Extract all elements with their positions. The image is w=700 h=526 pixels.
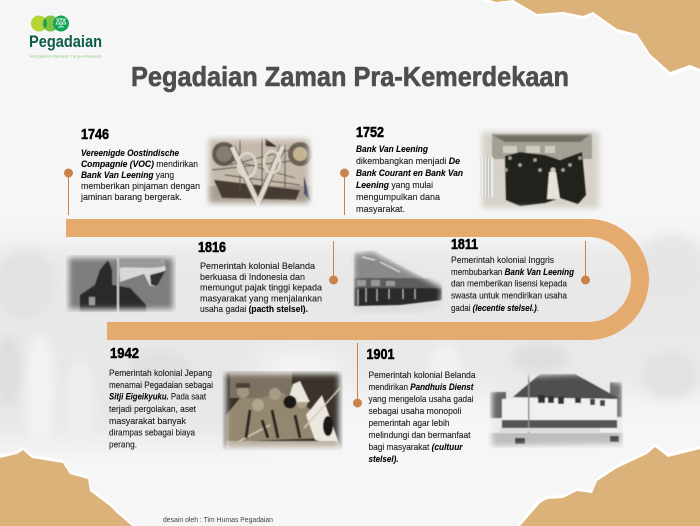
title: Pegadaian Zaman Pra-Kemerdekaan <box>131 61 569 92</box>
photo: colonial pawn office building <box>488 372 623 448</box>
photo: Japanese soldiers with flags <box>222 371 343 450</box>
text block: 1901: mendirikan Pandhuis Dienst <box>368 382 474 392</box>
text block: 1752 <box>356 125 463 214</box>
text block: 1942 <box>109 346 213 450</box>
text block: 1746 <box>80 127 200 202</box>
text block: 1746: memberikan pinjaman dengan <box>81 181 200 191</box>
text block: 1942: terjadi pergolakan, aset <box>109 404 196 414</box>
text block: 1901: stelsel). <box>368 454 398 464</box>
text block: 1746: jaminan barang bergerak. <box>80 192 182 202</box>
text block: 1942: dirampas sebagai biaya <box>109 428 195 438</box>
logo: Pegadaian: Mengatasi Masalah Tanpa Masalah <box>30 54 102 58</box>
text block: 1901 <box>366 347 476 464</box>
text block: 1752: Bank Van Leening <box>356 144 428 154</box>
text block: 1942: Sitji Eigeikyuku. Pada saat <box>109 392 206 402</box>
text block: 1811: membubarkan Bank Van Leening <box>451 267 574 277</box>
photo: flag above a building <box>66 255 176 312</box>
text block: 1942: perang. <box>109 440 137 450</box>
text block: 1816: usaha gadai (pacth stelsel). <box>200 304 308 314</box>
photo: pawn house with crowd <box>350 250 444 314</box>
text block: 1746: Vereenigde Oostindische <box>81 148 179 158</box>
torn paper corner: top right <box>482 0 700 76</box>
text block: 1752: dikembangkan menjadi De <box>356 156 460 166</box>
text block: 1901: bagi masyarakat (cultuur <box>368 442 463 452</box>
text block: 1942: 1942 <box>110 346 139 362</box>
logo: Pegadaian <box>29 16 102 58</box>
timeline band <box>66 228 640 331</box>
text block: 1901: pemerintah agar lebih <box>368 418 450 428</box>
photo: group in front of the bank <box>478 128 603 212</box>
text block: 1811: Pemerintah kolonial Inggris <box>451 255 554 265</box>
text block: 1811: dan memberikan lisensi kepada <box>451 278 567 288</box>
text block: 1942: masyarakat banyak <box>109 416 186 426</box>
text block: 1942: menamai Pegadaian sebagai <box>109 380 213 390</box>
text block: 1901: Pemerintah kolonial Belanda <box>368 370 476 380</box>
marker: 1746 <box>64 168 73 215</box>
text block: 1816: berkuasa di Indonesia dan <box>200 272 305 282</box>
torn paper corner: bottom left <box>0 447 136 526</box>
marker: 1901 <box>353 343 362 408</box>
text block: 1816: 1816 <box>198 240 226 256</box>
text block: 1811: 1811 <box>451 237 478 253</box>
text block: 1752: mengumpulkan dana <box>356 192 440 202</box>
text block: 1901: 1901 <box>366 347 394 363</box>
text block: 1752: Leening yang mulai <box>356 180 433 190</box>
text block: 1752: Bank Courant en Bank Van <box>356 168 463 178</box>
text block: 1816: memungut pajak tinggi kepada <box>200 282 322 292</box>
text block: 1942: Pemerintah kolonial Jepang <box>109 368 212 378</box>
credit line: desain oleh : Tim Humas Pegadaian <box>163 517 273 524</box>
text block: 1816 <box>198 240 322 314</box>
text block: 1816: Pemerintah kolonial Belanda <box>200 261 315 271</box>
text block: 1746: 1746 <box>81 127 109 143</box>
text block: 1901: yang mengelola usaha gadai <box>368 394 474 404</box>
text block: 1811: swasta untuk mendirikan usaha <box>451 290 567 300</box>
text block: 1752: 1752 <box>356 125 384 141</box>
text block: 1816: masyarakat yang menjalankan <box>200 294 322 304</box>
text block: 1746: Compagnie (VOC) mendirikan <box>81 159 198 169</box>
photo: VOC emblem and ship <box>205 135 313 207</box>
text block: 1746: Bank Van Leening yang <box>81 170 174 180</box>
text block: 1901: sebagai usaha monopoli <box>368 406 462 416</box>
text block: 1752: masyarakat. <box>356 204 405 214</box>
text block: 1811: gadai (lecentie stelsel.). <box>451 303 539 313</box>
marker: 1752 <box>340 168 349 215</box>
torn paper corner: bottom right <box>517 443 700 526</box>
marker: 1816 <box>329 241 338 284</box>
marker: 1811 <box>581 241 590 284</box>
logo: Pegadaian: Pegadaian <box>29 32 102 51</box>
text block: 1811 <box>451 237 574 313</box>
text block: 1901: melindungi dan bermanfaat <box>368 430 471 440</box>
